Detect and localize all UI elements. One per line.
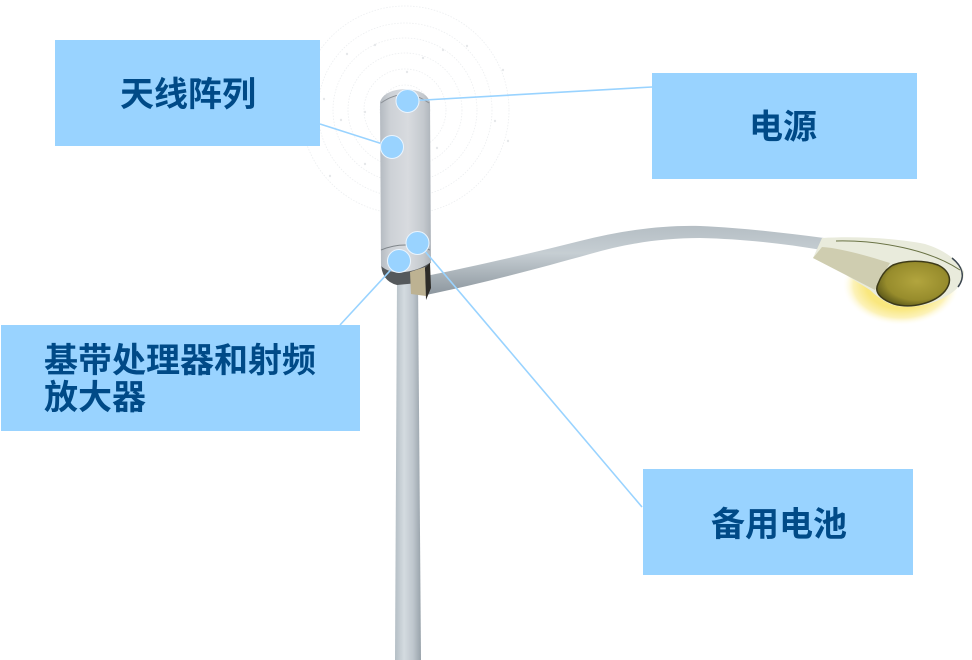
pole <box>395 280 421 660</box>
marker dots <box>380 90 429 272</box>
lamp arm <box>426 226 824 295</box>
label: baseband and RF amplifier: 放大器 <box>44 379 146 417</box>
label: antenna array <box>55 40 320 146</box>
label: baseband and RF amplifier: 基带处理器和射频 <box>44 342 316 380</box>
antenna cylinder <box>380 89 431 300</box>
street lamp head <box>813 237 964 307</box>
label: antenna array: 天线阵列 <box>120 76 256 114</box>
street lamp glow <box>843 245 959 325</box>
label: backup battery: 备用电池 <box>711 506 847 544</box>
label: power: 电源 <box>749 108 817 146</box>
label: power <box>652 73 917 179</box>
signal rings <box>301 6 509 214</box>
bracket <box>410 267 426 296</box>
leader lines <box>320 87 652 507</box>
label: baseband and RF amplifier <box>1 325 360 431</box>
label: backup battery <box>643 469 913 575</box>
